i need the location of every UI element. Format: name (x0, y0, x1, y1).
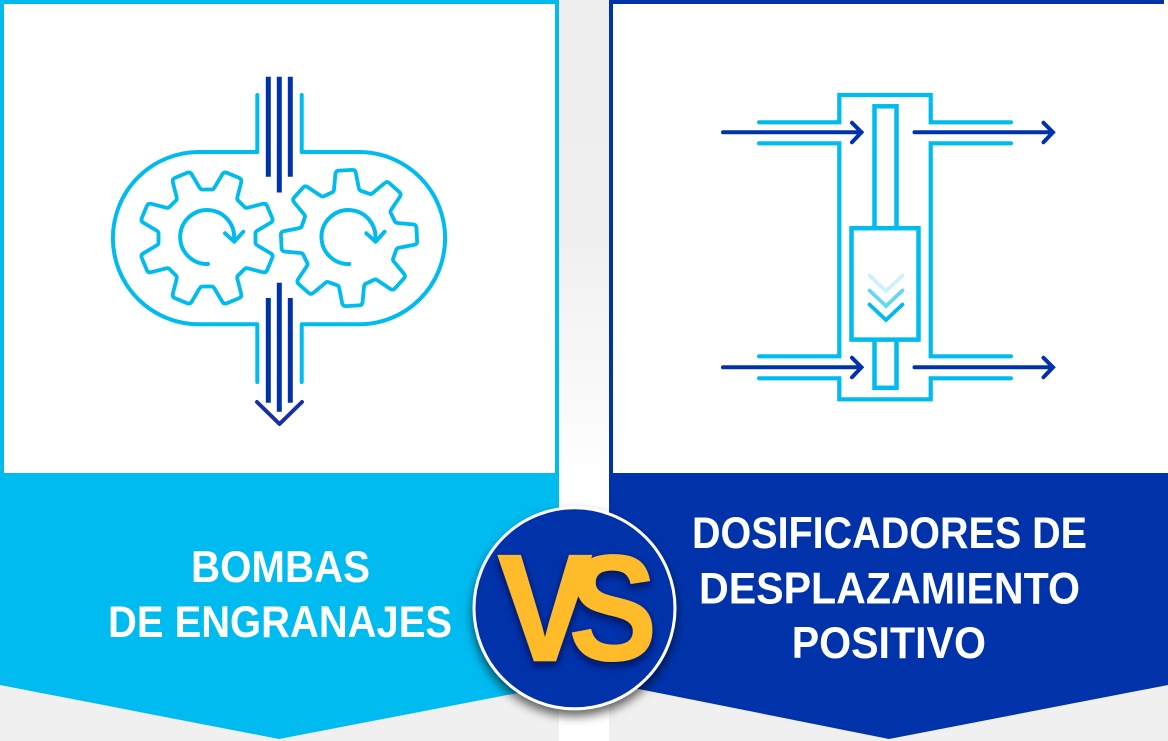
flow arrow: outlet (257, 283, 302, 424)
gear: right (278, 167, 420, 309)
gear: left (118, 149, 296, 327)
banner: right chevron (609, 473, 1168, 739)
badge text (498, 523, 657, 693)
badge circle (474, 508, 675, 709)
panel: bombas de engranajes (0, 2, 559, 739)
heading: bombas de engranajes (108, 543, 452, 647)
heading: dosificadores de desplazamiento positivo (692, 509, 1087, 668)
badge: VS (474, 508, 675, 709)
badge text: V (498, 523, 592, 692)
heading: dosificadores de desplazamiento positivo: DOSIFICADORES DE (692, 509, 1087, 558)
piston rod (874, 106, 896, 388)
panel: dosificadores de desplazamiento positivo (609, 0, 1168, 739)
arrow: upper inlet (723, 123, 862, 142)
heading: dosificadores de desplazamiento positivo: DESPLAZAMIENTO (699, 564, 1080, 613)
icon: positive displacement doser (723, 95, 1053, 399)
rotation arrow: right gear (321, 210, 385, 264)
heading: bombas de engranajes: BOMBAS (191, 543, 370, 592)
heading: dosificadores de desplazamiento positivo: POSITIVO (792, 619, 986, 668)
pump housing (113, 95, 445, 382)
badge text: S (568, 524, 657, 693)
heading: bombas de engranajes: DE ENGRANAJES (108, 598, 452, 647)
arrow: upper outlet (914, 123, 1053, 142)
flow lines: inlet (268, 77, 290, 192)
icon: gear pump (113, 77, 445, 424)
piston head (852, 228, 918, 340)
doser body (759, 95, 1011, 399)
icon frame: left panel (2, 2, 557, 475)
chevrons: downward motion (870, 276, 902, 320)
rotation arrow: left gear (180, 210, 243, 264)
arrow: lower inlet (723, 358, 862, 377)
icon frame: right panel (611, 2, 1166, 475)
arrow: lower outlet (914, 358, 1053, 377)
banner: left chevron (0, 473, 559, 739)
